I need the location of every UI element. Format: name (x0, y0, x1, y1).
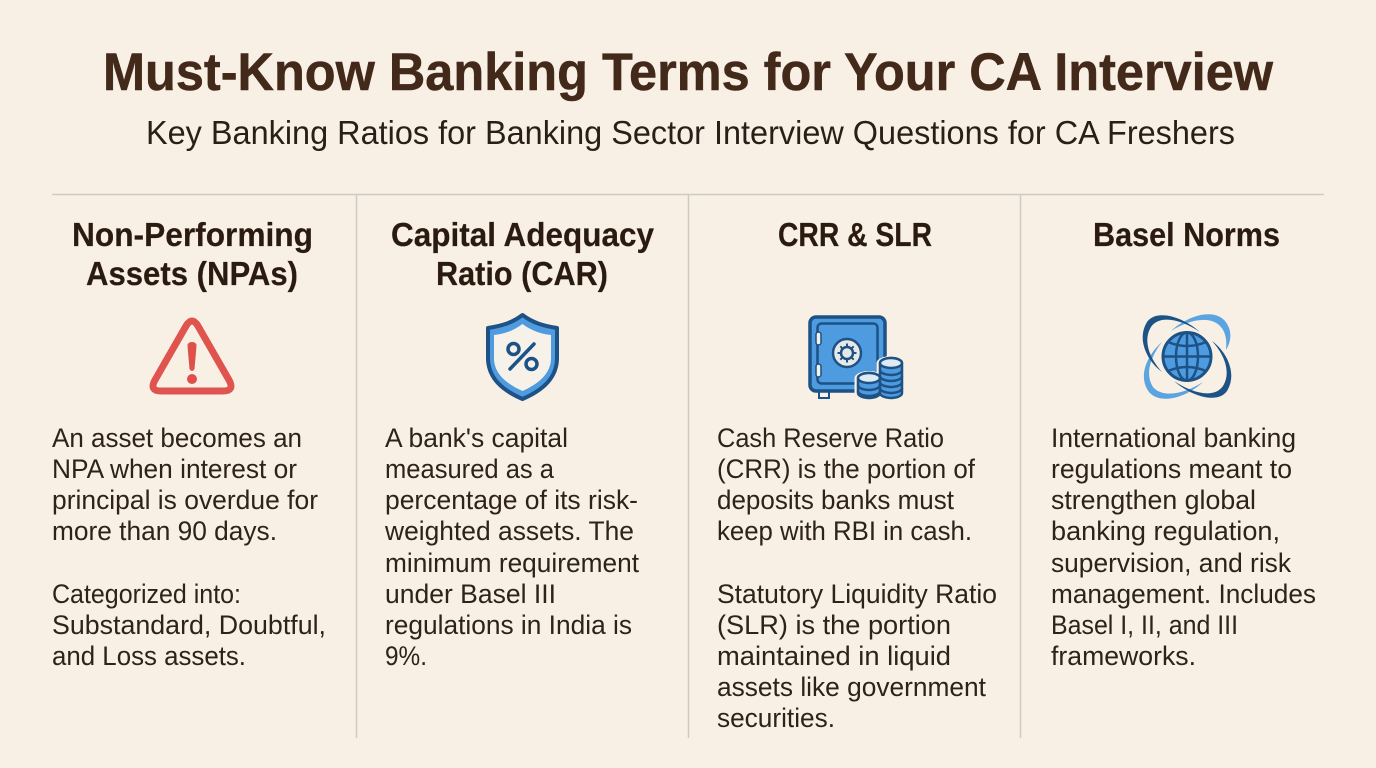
text: Basel definition: International banking (1051, 423, 1296, 453)
text: CAR definition: under Basel III (385, 579, 556, 609)
heading: NPAs (72, 216, 313, 292)
panel: CRR and SLR (717, 216, 997, 733)
text: NPA definition (52, 423, 326, 671)
heading: CAR: Capital Adequacy (391, 216, 655, 253)
panel: Basel Norms (1051, 216, 1316, 671)
heading: CRR & SLR: CRR & SLR (778, 216, 932, 253)
text: Basel definition: supervision, and risk (1051, 548, 1292, 578)
text: Basel definition: Basel I, II, and III (1051, 610, 1238, 640)
text: CRR and SLR definition (717, 423, 997, 733)
text: CRR and SLR definition: keep with RBI in cash. (717, 516, 972, 546)
subtitle: Key Banking Ratios for Banking Sector Interview Questions for CA Freshers (146, 114, 1235, 151)
panel: Non-Performing Assets (52, 216, 326, 671)
text: Basel definition: management. Includes (1051, 579, 1316, 609)
text: NPA definition: Categorized into: (52, 579, 241, 609)
heading: CAR: Ratio (CAR) (436, 255, 608, 292)
text: NPA definition: more than 90 days. (52, 516, 277, 546)
text: Basel definition: regulations meant to (1051, 454, 1292, 484)
text: CRR and SLR definition: Statutory Liquidity Ratio (717, 579, 997, 609)
text: CAR definition: minimum requirement (385, 548, 640, 578)
text: CAR definition: A bank's capital (385, 423, 568, 453)
text: CRR and SLR definition: (SLR) is the portion (717, 610, 951, 640)
icon: percent shield (488, 315, 557, 399)
icon: globe with orbits (1143, 314, 1231, 399)
heading: Basel Norms: Basel Norms (1093, 216, 1280, 253)
text: CAR definition: measured as a (385, 454, 554, 484)
text: Basel definition: frameworks. (1051, 641, 1196, 671)
text: CAR definition: percentage of its risk- (385, 485, 638, 515)
text: NPA definition: principal is overdue for (52, 485, 318, 515)
text: NPA definition: and Loss assets. (52, 641, 246, 671)
panel: Capital Adequacy Ratio (384, 216, 655, 671)
text: CRR and SLR definition: deposits banks must (717, 485, 955, 515)
text: CRR and SLR definition: securities. (717, 703, 835, 733)
icon: warning triangle (153, 321, 231, 391)
text: CRR and SLR definition: maintained in liquid (717, 641, 951, 671)
heading: NPAs: Assets (NPAs) (86, 255, 298, 292)
text: NPA definition: Substandard, Doubtful, (52, 610, 326, 640)
text: CRR and SLR definition: Cash Reserve Ratio (717, 423, 944, 453)
text: CRR and SLR definition: assets like government (717, 672, 987, 702)
text: CAR definition: weighted assets. The (384, 516, 634, 546)
text: NPA definition: NPA when interest or (52, 454, 297, 484)
text: CAR definition: 9%. (385, 641, 427, 671)
coins (858, 358, 902, 398)
heading: NPAs: Non-Performing (72, 216, 313, 253)
title: Must-Know Banking Terms for Your CA Interview (103, 43, 1274, 102)
text: Basel definition (1051, 423, 1316, 671)
text: Basel definition: banking regulation, (1051, 516, 1280, 546)
text: CRR and SLR definition: (CRR) is the portion of (717, 454, 976, 484)
text: NPA definition: An asset becomes an (52, 423, 302, 453)
icon: safe with coins (810, 317, 902, 398)
text: Basel definition: strengthen global (1051, 485, 1256, 515)
heading: CAR (391, 216, 655, 292)
text: CAR definition (384, 423, 640, 671)
text: CAR definition: regulations in India is (385, 610, 632, 640)
